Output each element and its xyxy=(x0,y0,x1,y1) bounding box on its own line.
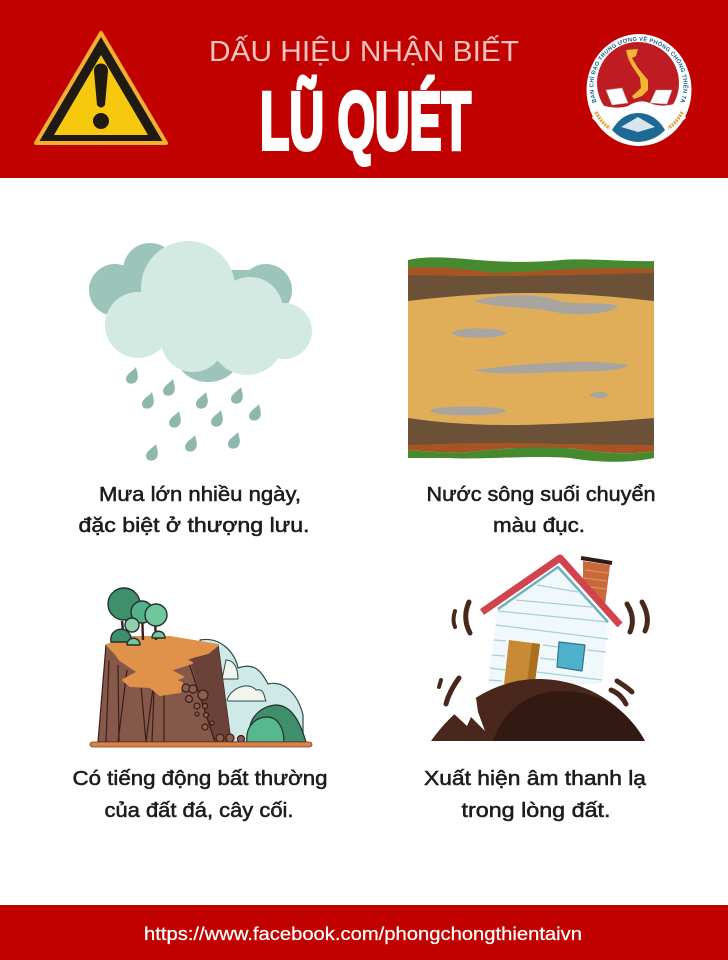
heading: title: LŨ QUÉT xyxy=(260,76,471,167)
footer link: https://www.facebook.com/phongchongthientaivn xyxy=(144,923,582,944)
roof xyxy=(482,558,620,625)
logo: map of Vietnam xyxy=(626,49,648,99)
white clouds xyxy=(222,660,266,701)
trees xyxy=(108,588,167,645)
house wall xyxy=(488,568,608,684)
shake lines xyxy=(439,602,647,704)
hill xyxy=(431,679,645,741)
bushes xyxy=(249,705,306,742)
text: caption house xyxy=(424,767,647,822)
text: caption landslide xyxy=(72,767,328,822)
text: caption house: trong lòng đất. xyxy=(462,799,610,822)
icon: muddy river xyxy=(408,257,654,462)
window xyxy=(557,642,585,671)
text: caption rain: đặc biệt ở thượng lưu. xyxy=(78,514,310,537)
panel: footer xyxy=(0,905,728,960)
text: caption river xyxy=(426,483,656,537)
door xyxy=(504,640,540,684)
text: caption river: màu đục. xyxy=(493,514,585,537)
icon: rain cloud xyxy=(89,241,312,461)
cliff xyxy=(98,645,231,742)
ground bar xyxy=(90,742,312,747)
cliff cracks xyxy=(106,660,215,742)
icon: committee emblem xyxy=(586,34,692,146)
text: caption rain: Mưa lớn nhiều ngày, xyxy=(99,483,301,506)
logo: gear xyxy=(612,113,665,142)
text: caption rain xyxy=(78,483,310,537)
orange ground top xyxy=(107,637,218,695)
icon: landslide cliff xyxy=(90,588,312,747)
logo: wheat xyxy=(596,112,682,128)
text: caption river: Nước sông suối chuyển xyxy=(426,483,656,506)
logo: hands xyxy=(606,88,672,105)
background clouds xyxy=(200,639,303,742)
heading: subtitle: DẤU HIỆU NHẬN BIẾT xyxy=(209,34,519,68)
text: caption landslide: của đất đá, cây cối. xyxy=(104,799,294,822)
text: caption landslide: Có tiếng động bất thường xyxy=(72,767,328,790)
panel: header xyxy=(0,0,728,178)
icon: shaking house xyxy=(428,558,647,741)
icon: warning triangle xyxy=(36,33,166,143)
cliff shadow xyxy=(190,645,231,742)
chimney xyxy=(581,558,612,605)
falling rocks xyxy=(182,684,244,742)
ground crack xyxy=(428,698,485,741)
wall siding xyxy=(489,585,608,681)
hill shadow xyxy=(493,691,645,741)
text: caption house: Xuất hiện âm thanh lạ xyxy=(424,767,647,790)
